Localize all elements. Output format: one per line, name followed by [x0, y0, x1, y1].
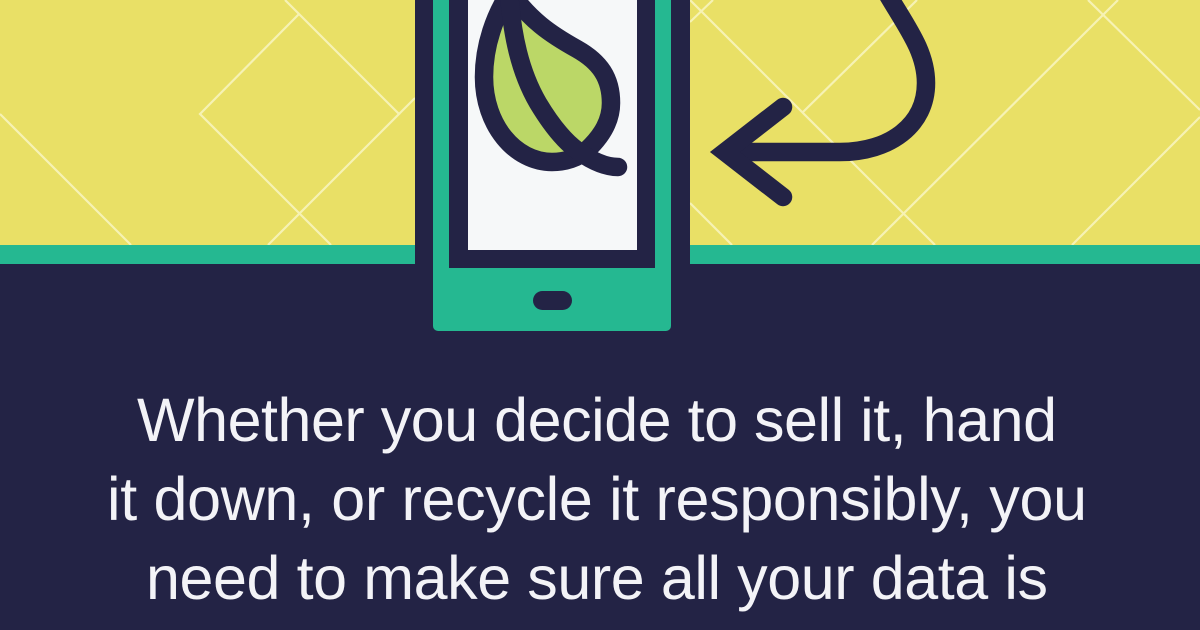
panel: navy lower section — [0, 264, 1200, 630]
icon: smartphone — [415, 0, 690, 346]
text block: message — [107, 386, 1087, 612]
panel: green stripe — [0, 245, 1200, 264]
panel: yellow background with diamond pattern — [0, 0, 1200, 245]
icon: leaf — [484, 0, 618, 167]
text block: message: Whether you decide to sell it, hand — [137, 386, 1057, 454]
text block: message: need to make sure all your data is — [146, 544, 1048, 612]
text block: message: it down, or recycle it responsibly, you — [107, 465, 1087, 533]
arrow: curved arrow pointing to phone — [725, 0, 926, 197]
